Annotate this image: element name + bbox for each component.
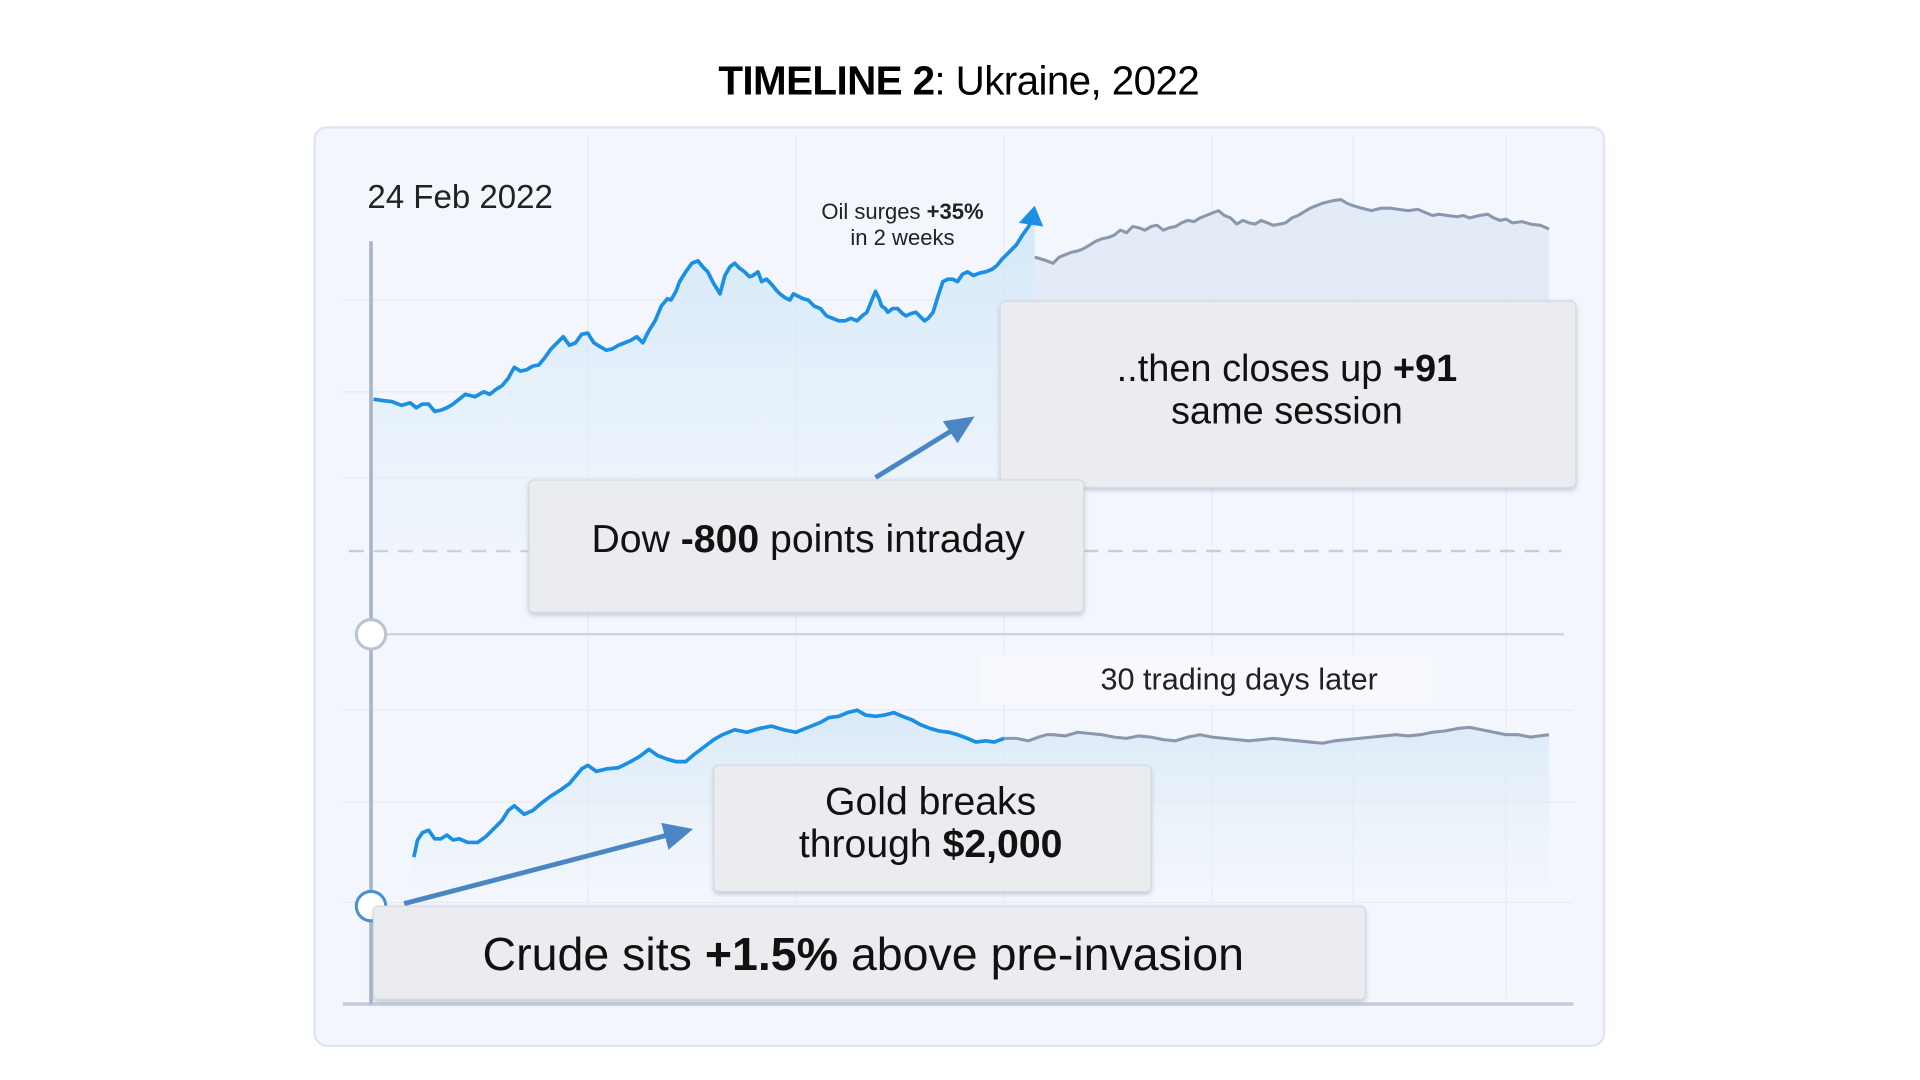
axis: vertical timeline	[356, 241, 386, 1004]
panel: chart background	[315, 127, 1604, 1046]
callout: gold	[714, 765, 1151, 891]
callout: crude	[373, 906, 1365, 999]
arrow: to gold	[404, 823, 693, 904]
chart: bottom line	[414, 710, 1549, 888]
callout: gold: through $2,000	[799, 823, 1062, 866]
callout: then closes up: ..then closes up +91	[1117, 348, 1457, 390]
oil annotation: Oil surges +35%	[821, 199, 984, 224]
callout: crude: Crude sits +1.5% above pre-invasion	[483, 928, 1244, 980]
label: 30 trading days later	[980, 655, 1433, 704]
arrow: oil surge	[1019, 206, 1043, 227]
oil annotation: in 2 weeks	[850, 225, 954, 250]
callout: dow -800	[529, 480, 1084, 612]
callout: then closes up	[1000, 301, 1576, 487]
title: TIMELINE 2: Ukraine, 2022	[718, 57, 1199, 103]
label: 30 trading days later: 30 trading days later	[1101, 662, 1378, 696]
callout: then closes up: same session	[1171, 391, 1403, 433]
callout: gold: Gold breaks	[825, 780, 1036, 823]
arrow: dow to close	[876, 416, 975, 478]
chart: top line	[373, 200, 1549, 551]
callout: dow -800: Dow -800 points intraday	[592, 518, 1025, 561]
date label: 24 Feb 2022	[367, 179, 553, 216]
